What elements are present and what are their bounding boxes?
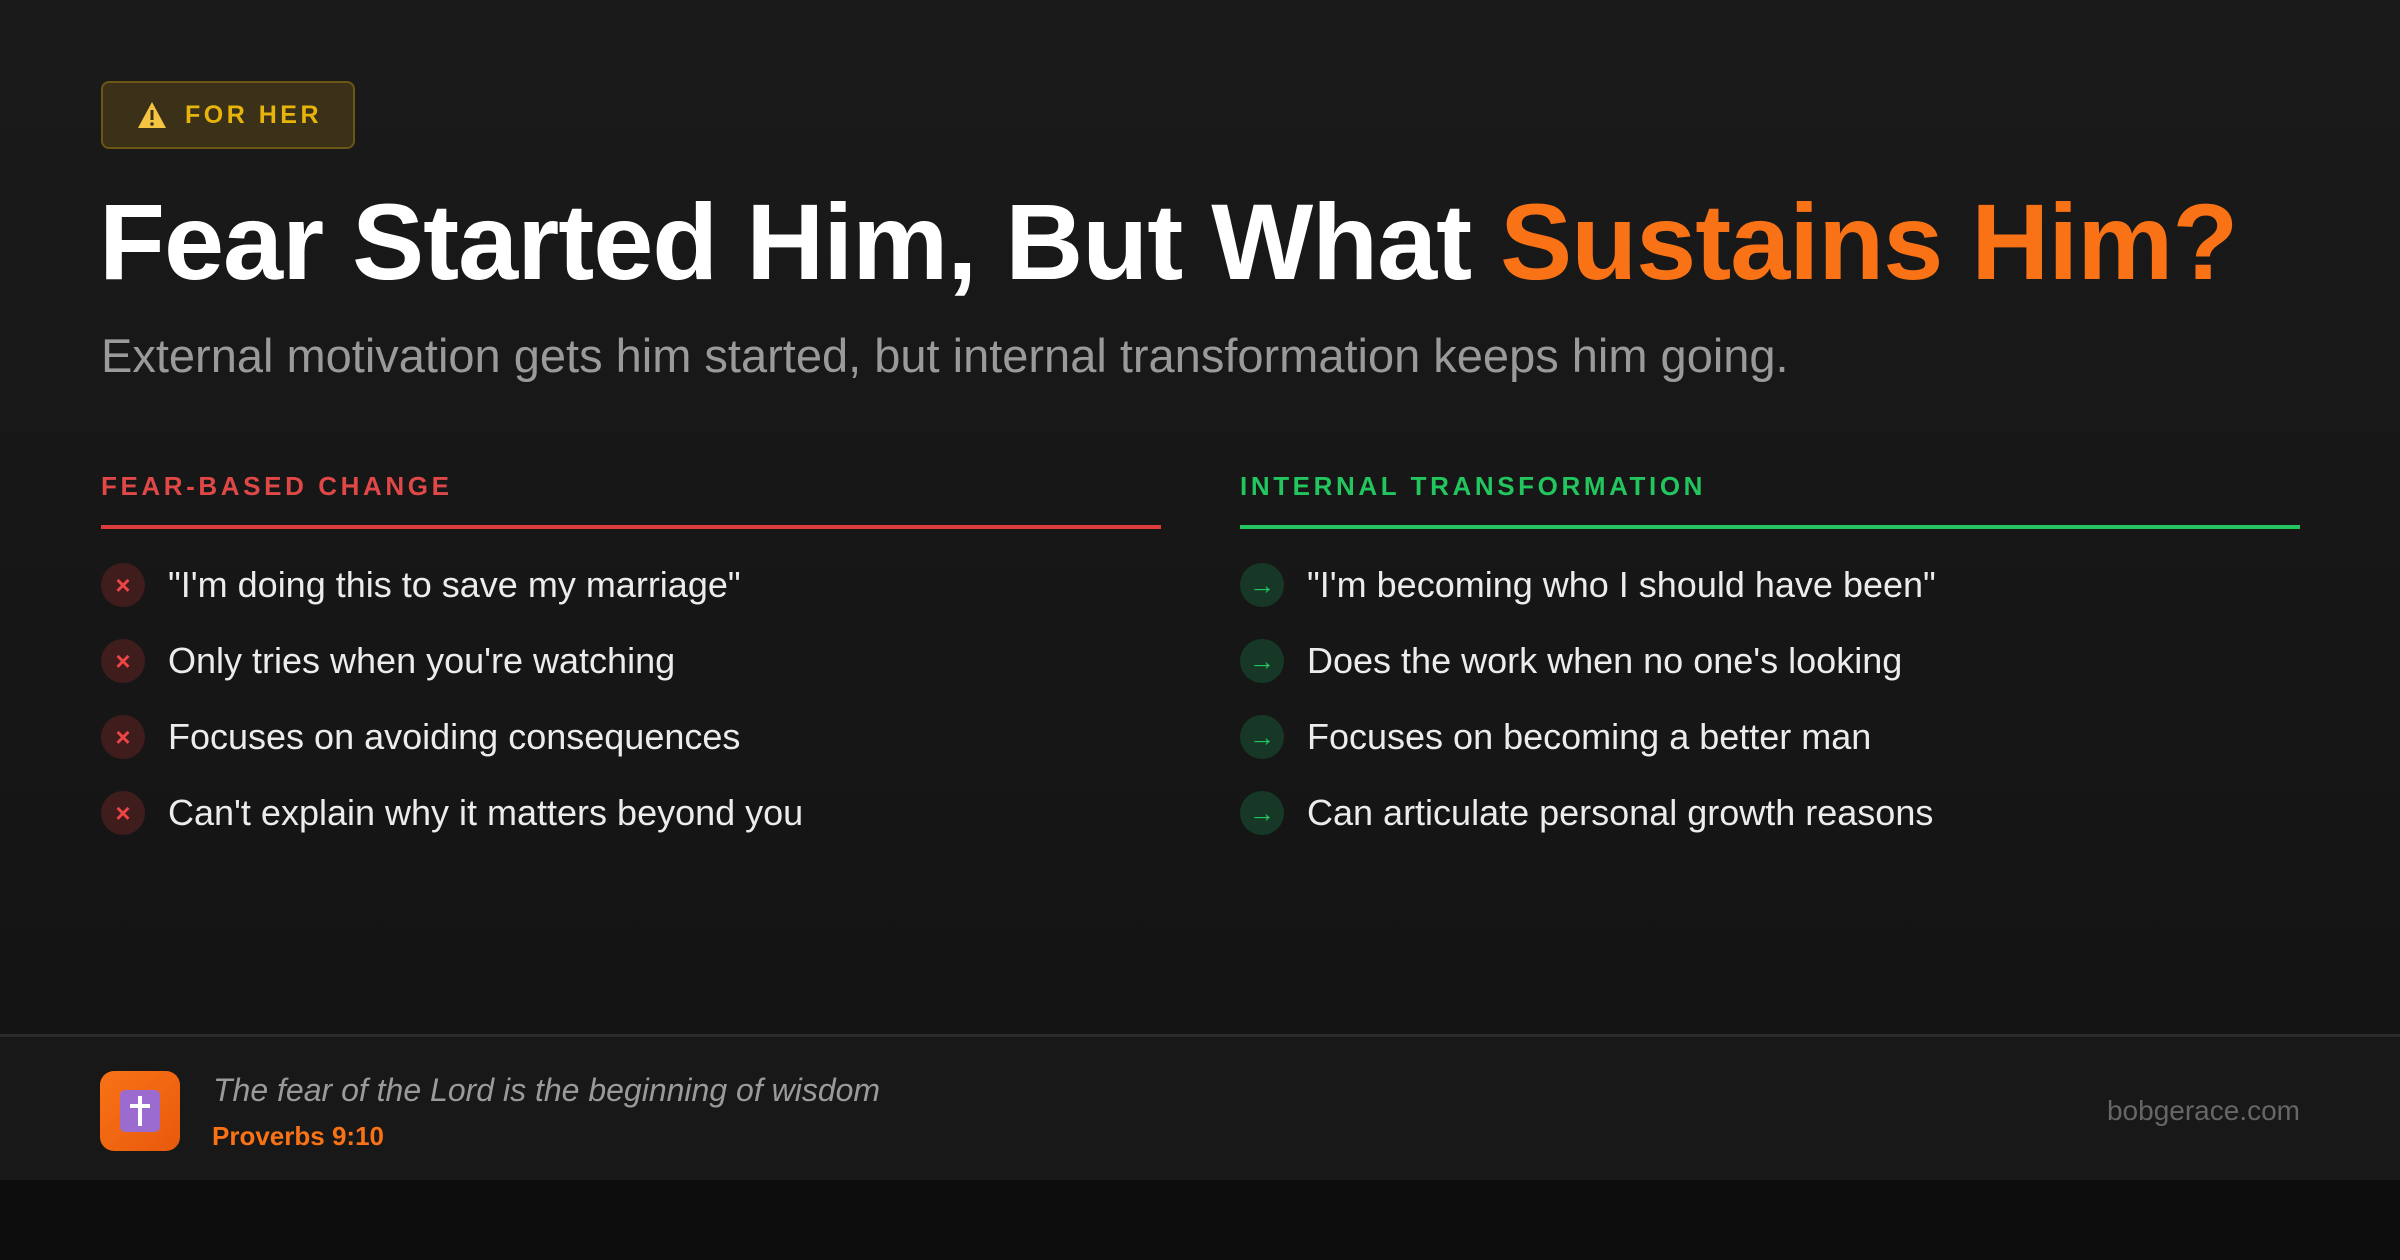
title: Fear Started Him, But What Sustains Him? xyxy=(99,181,2237,302)
item 4: Can't explain why it matters beyond you xyxy=(168,792,803,833)
item 3: → xyxy=(1249,722,1275,752)
site: bobgerace.com xyxy=(2107,1095,2300,1126)
item 2: Only tries when you're watching xyxy=(168,640,675,681)
heading: fear-based change: FEAR-BASED CHANGE xyxy=(101,471,453,501)
item 1: "I'm doing this to save my marriage" xyxy=(168,564,741,605)
subtitle: External motivation gets him started, but internal transformation keeps him going. xyxy=(101,329,1789,382)
item 4: × xyxy=(115,798,131,828)
item 3: × xyxy=(115,722,131,752)
item 1: × xyxy=(115,570,131,600)
item 1: "I'm becoming who I should have been" xyxy=(1307,564,1936,605)
item 4: → xyxy=(1249,798,1275,828)
heading: internal transformation: INTERNAL TRANSFORMATION xyxy=(1240,471,1706,501)
reference: Proverbs 9:10 xyxy=(212,1121,384,1151)
item 2: × xyxy=(115,646,131,676)
badge: for her: FOR HER xyxy=(185,100,322,128)
icon: cross xyxy=(100,1071,180,1151)
list: fear-based xyxy=(101,563,803,835)
item 2: Does the work when no one's looking xyxy=(1307,640,1902,681)
item 3: Focuses on avoiding consequences xyxy=(168,716,740,757)
item 2: → xyxy=(1249,646,1275,676)
item 1: → xyxy=(1249,570,1275,600)
badge: for her xyxy=(101,81,355,149)
list: internal xyxy=(1240,563,1936,835)
item 4: Can articulate personal growth reasons xyxy=(1307,792,1933,833)
item 3: Focuses on becoming a better man xyxy=(1307,716,1871,757)
quote: The fear of the Lord is the beginning of wisdom xyxy=(213,1072,880,1108)
footer xyxy=(0,1034,2400,1180)
